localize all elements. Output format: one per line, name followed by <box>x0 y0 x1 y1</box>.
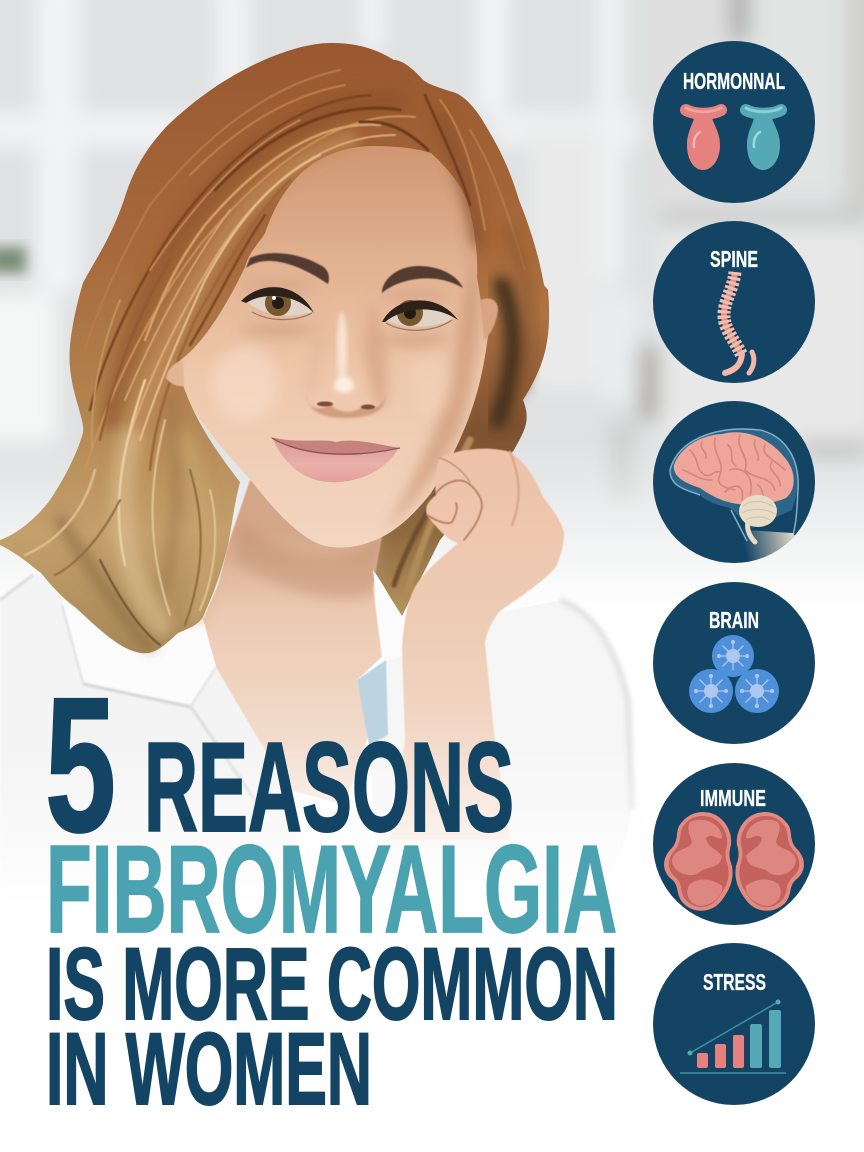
icon: stress chart: STRESS <box>703 969 766 995</box>
portrait of the woman <box>0 43 632 920</box>
blue inner shirt <box>357 660 388 745</box>
title word reasons: REASONS <box>144 716 514 858</box>
left ear edge <box>166 360 184 386</box>
broad hair tone bands <box>60 100 478 645</box>
coat left <box>0 573 310 920</box>
kidney left <box>664 812 733 911</box>
icon: spine: SPINE <box>710 246 758 272</box>
icon: immune cells labelled brain <box>653 582 815 744</box>
coat right soft shading <box>560 600 632 810</box>
kidney right <box>735 812 804 911</box>
icon: immune kidneys <box>653 763 815 925</box>
icon: spine <box>653 221 815 383</box>
icon: hormonal: HORMONNAL <box>683 68 785 94</box>
collar shadow lines <box>0 575 255 800</box>
coat right <box>369 600 632 920</box>
icon: hormonal <box>653 41 815 203</box>
collar right strip <box>373 570 405 662</box>
lower right hair strands <box>394 440 470 590</box>
neck shadow below jaw <box>232 520 385 598</box>
face shading <box>211 240 479 530</box>
face <box>170 130 490 548</box>
icon: brain anatomy <box>653 401 815 575</box>
lips <box>270 437 400 482</box>
white fade behind title <box>0 735 864 950</box>
neck and chest <box>203 480 385 805</box>
fine hair strands <box>25 70 525 645</box>
icon: stress chart <box>653 943 815 1105</box>
collar left <box>62 600 216 705</box>
hair behind neck on right <box>340 170 549 616</box>
title <box>45 657 618 1126</box>
eyes <box>241 287 458 330</box>
title line in women: IN WOMEN <box>46 1012 372 1126</box>
icon: immune kidneys: IMMUNE <box>700 785 766 811</box>
ear <box>480 298 498 340</box>
hair front mass <box>0 43 548 653</box>
finger creases <box>427 452 518 540</box>
upper right hair shadow <box>498 230 530 420</box>
icon: immune cells labelled brain: BRAIN <box>709 607 759 633</box>
hand and forearm <box>390 449 564 840</box>
nose <box>306 312 386 418</box>
title numeral 5: 5 <box>45 657 116 872</box>
eyebrows <box>246 253 463 293</box>
